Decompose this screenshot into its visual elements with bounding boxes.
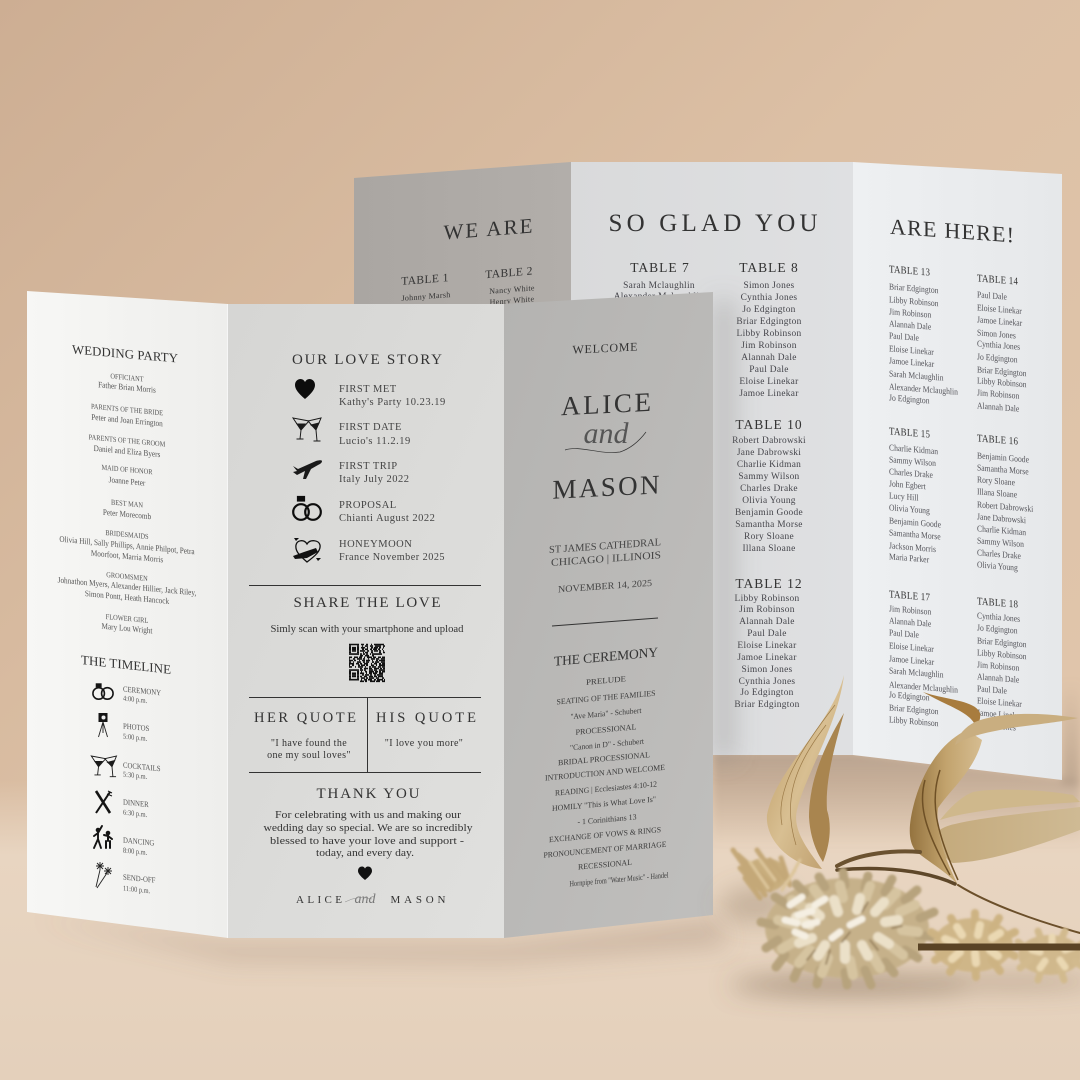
table 8 list: Jo Edgington [742, 305, 796, 315]
love story timeline text: Kathy's Party 10.23.19 [339, 397, 446, 408]
text: we are tables: TABLE 1 [401, 272, 449, 288]
thank you message: blessed to have your love and support - [270, 836, 465, 847]
timeline labels: DINNER [123, 797, 149, 809]
table 7 list: Sarah Mclaughlin [623, 281, 695, 291]
panel: front right welcome and ceremony [504, 292, 713, 938]
column: tables 13, 15, 17: Eloise Linekar [889, 641, 934, 654]
column: tables 13, 15, 17: Benjamin Goode [889, 516, 941, 530]
column: tables 14, 16, 18: Jim Robinson [977, 660, 1020, 673]
heading: our love story: OUR LOVE STORY [292, 352, 442, 368]
column: tables 14, 16, 18: Illana Sloane [977, 487, 1017, 500]
column: tables 13, 15, 17: Eloise Linekar [889, 344, 934, 357]
column: tables 13, 15, 17: Paul Dale [889, 628, 919, 640]
heading: the timeline: THE TIMELINE [81, 652, 171, 677]
names and welcome [553, 338, 660, 505]
table 10 list: Rory Sloane [744, 532, 794, 542]
column: tables 13, 15, 17: Libby Robinson [889, 295, 939, 309]
ceremony program: PRELUDE [586, 674, 626, 687]
ceremony program: INTRODUCTION AND WELCOME [545, 763, 665, 783]
her quote: HER QUOTE [254, 710, 356, 726]
column: tables 14, 16, 18: Rory Sloane [977, 475, 1015, 488]
love story timeline text: Lucio's 11.2.19 [339, 436, 411, 447]
plant cast shadow [720, 887, 1080, 995]
column: tables 14, 16, 18: Paul Dale [977, 684, 1007, 696]
love story timeline text: France November 2025 [339, 552, 445, 563]
thank you message: wedding day so special. We are so incredibly [264, 823, 473, 834]
list: wedding party names: Joanne Peter [109, 475, 146, 488]
ceremony program: PRONOUNCEMENT OF MARRIAGE [544, 840, 667, 860]
his quote: HIS QUOTE [376, 710, 476, 726]
column: tables 13, 15, 17: Jim Robinson [889, 307, 932, 320]
list: wedding party names: Simon Pontt, Heath Hancock [85, 589, 169, 606]
column: tables 13, 15, 17: Sarah Mclaughlin [889, 666, 944, 680]
column: tables 14, 16, 18: Benjamin Goode [977, 451, 1029, 465]
icon: sparklers (send-off) [96, 862, 112, 888]
icon: small heart [358, 866, 372, 880]
icon: airplane [293, 460, 322, 479]
table 10 list: Charlie Kidman [737, 460, 801, 470]
ceremony program: Hornpipe from "Water Music" - Handel [570, 870, 669, 888]
venue and date: ST JAMES CATHEDRAL [549, 537, 661, 556]
table 8 list: Eloise Linekar [739, 377, 799, 387]
divider [552, 618, 658, 626]
column: tables 14, 16, 18: Cynthia Jones [977, 339, 1020, 352]
column: tables 13, 15, 17: Briar Edgington [889, 282, 939, 296]
timeline labels: 11:00 p.m. [123, 884, 150, 895]
icon: rings (ceremony) [93, 684, 113, 699]
table 10 list: Olivia Young [742, 496, 796, 506]
table 12 list: Paul Dale [747, 629, 787, 639]
column: tables 13, 15, 17: Lucy Hill [889, 491, 919, 503]
table 8 list: TABLE 8 [739, 260, 799, 275]
column: tables 14, 16, 18: Charlie Kidman [977, 524, 1027, 538]
list: wedding party names: Moorfoot, Marria Morris [91, 548, 163, 565]
his quote [376, 710, 476, 749]
ceremony program: - 1 Corinithians 13 [578, 812, 637, 827]
venue and date: CHICAGO | ILLINOIS [551, 550, 661, 569]
love story timeline text: FIRST TRIP [339, 461, 398, 472]
timeline labels: 8:00 p.m. [123, 846, 147, 857]
panel: front middle love story [228, 304, 504, 938]
names and welcome: MASON [553, 469, 660, 505]
table 8 list: Alannah Dale [741, 353, 797, 363]
icon: dancers (dancing) [94, 826, 112, 848]
her quote: "I have found the [271, 738, 347, 749]
table 12 list: Jo Edgington [740, 688, 794, 698]
table 8 list: Jim Robinson [741, 341, 797, 351]
heading: so glad you: SO GLAD YOU [608, 210, 818, 237]
column: tables 14, 16, 18: Jane Dabrowski [977, 512, 1027, 525]
list: wedding party names: BRIDESMAIDS [105, 529, 149, 541]
table 10 list: Jane Dabrowski [737, 448, 801, 458]
signature names [296, 892, 446, 907]
leaf: horizontal lower [937, 807, 1080, 863]
column: tables 13, 15, 17: Jo Edgington [889, 690, 930, 703]
panel: back middle "so glad you" [571, 162, 853, 755]
column: tables 14, 16, 18: Cynthia Jones [977, 611, 1020, 624]
script: and [565, 417, 646, 453]
fold highlight [227, 304, 229, 938]
ceremony program [544, 643, 669, 891]
icon: rings [293, 497, 321, 520]
names and welcome: WELCOME [572, 339, 638, 357]
timeline labels: 5:30 p.m. [123, 770, 147, 781]
table 8 list [736, 260, 802, 399]
ceremony program: "Canon in D" - Schubert [570, 737, 645, 752]
icon: cocktail glasses (cocktails) [91, 756, 116, 777]
list: wedding party names: Olivia Hill, Sally Phillips, Annie Philpot, Petra [59, 534, 195, 557]
timeline labels: PHOTOS [123, 721, 149, 733]
text: we are tables [401, 213, 535, 314]
table 10 list: Robert Dabrowski [732, 436, 806, 446]
ceremony program: THE CEREMONY [554, 644, 658, 669]
column: tables 14, 16, 18: Jim Robinson [977, 388, 1020, 401]
column: tables 13, 15, 17: Briar Edgington [889, 703, 939, 717]
column: tables 14, 16, 18: Paul Dale [977, 290, 1007, 302]
icon: heart [295, 379, 315, 399]
table 7 list: Alexander Mclaughlin [614, 292, 704, 302]
venue and date: NOVEMBER 14, 2025 [558, 579, 652, 595]
panel: back right "are here" [853, 162, 1062, 780]
column: tables 13, 15, 17: Alannah Dale [889, 319, 932, 332]
table 10 list: Charles Drake [740, 484, 798, 494]
table 10 list: TABLE 10 [735, 417, 803, 432]
column: tables 14, 16, 18: Sammy Wilson [977, 536, 1025, 549]
table 8 list: Cynthia Jones [741, 293, 797, 303]
heading: wedding party: WEDDING PARTY [72, 343, 178, 366]
love story timeline text: PROPOSAL [339, 500, 397, 511]
text: scan instruction: Simly scan with your smartphone and upload [270, 624, 464, 635]
ceremony program: "Ave Maria" - Schubert [571, 706, 642, 721]
column: tables 14, 16, 18: Alannah Dale [977, 401, 1020, 414]
column: tables 13, 15, 17: Olivia Young [889, 503, 931, 516]
column: tables 13, 15, 17: Alexander Mclaughlin [889, 382, 959, 397]
stems [837, 851, 1080, 933]
column: tables 14, 16, 18: Briar Edgington [977, 365, 1027, 379]
column: tables 13, 15, 17: Jo Edgington [889, 393, 930, 406]
text: we are tables: Henry White [490, 294, 534, 307]
icon: heart with plane [293, 538, 321, 562]
timeline labels: DANCING [123, 835, 155, 848]
icon: martini glasses [293, 418, 321, 441]
table 10 list [732, 417, 806, 554]
column: tables 13, 15, 17: TABLE 17 [889, 589, 930, 604]
column: tables 14, 16, 18: Olivia Young [977, 560, 1019, 573]
list: wedding party names: Peter Morecomb [103, 507, 151, 521]
column: tables 14, 16, 18 [977, 273, 1034, 734]
love story timeline text: Italy July 2022 [339, 474, 410, 485]
script: and: and [584, 417, 630, 450]
column: tables 14, 16, 18: Robert Dabrowski [977, 500, 1034, 514]
timeline labels: 4:00 p.m. [123, 694, 147, 705]
list: wedding party names: GROOMSMEN [106, 571, 148, 583]
list: wedding party names [58, 367, 196, 640]
divider [249, 584, 481, 586]
table 12 list: Jamoe Linekar [737, 653, 797, 663]
ceremony program: EXCHANGE OF VOWS & RINGS [549, 825, 661, 844]
column: tables 13, 15, 17: Jackson Morris [889, 541, 936, 554]
text: we are tables: Johnny Marsh [401, 290, 451, 303]
timeline labels: COCKTAILS [123, 760, 161, 773]
column: tables 13, 15, 17: TABLE 13 [889, 264, 930, 279]
column: tables 14, 16, 18: Libby Robinson [977, 376, 1027, 390]
ceremony program: READING | Ecclesiastes 4:10-12 [555, 780, 657, 798]
column: tables 13, 15, 17 [889, 264, 959, 730]
list: wedding party names: Johnathon Myers, Alexander Hillier, Jack Riley, [58, 575, 196, 598]
love story timeline text: Chianti August 2022 [339, 513, 435, 524]
table 8 list: Jamoe Linekar [739, 389, 799, 399]
list: wedding party names: OFFICIANT [110, 372, 144, 384]
list: wedding party names: Father Brian Morris [98, 380, 156, 395]
column: tables 13, 15, 17: Sarah Mclaughlin [889, 369, 944, 383]
column: tables 14, 16, 18: Samantha Morse [977, 463, 1029, 477]
table 7 list [614, 260, 704, 302]
love story timeline text: FIRST MET [339, 384, 397, 395]
column: tables 13, 15, 17: Alexander Mclaughlin [889, 680, 959, 695]
column: tables 13, 15, 17: TABLE 15 [889, 426, 930, 441]
text: we are tables: WE ARE [444, 213, 532, 245]
column: tables 13, 15, 17: Alannah Dale [889, 616, 932, 629]
flower: main head [761, 872, 934, 985]
table 7 list: TABLE 7 [630, 260, 690, 275]
thank you message: today, and every day. [316, 848, 414, 859]
panel: front left wedding party and timeline [27, 291, 228, 938]
table 12 list: Cynthia Jones [739, 677, 795, 687]
column: tables 14, 16, 18: Jo Edgington [977, 352, 1018, 365]
list: wedding party names: PARENTS OF THE GROOM [89, 433, 165, 449]
list: wedding party names: PARENTS OF THE BRIDE [91, 402, 163, 418]
column: tables 13, 15, 17: Sammy Wilson [889, 455, 937, 468]
timeline labels: 5:00 p.m. [123, 732, 147, 743]
list: wedding party names: FLOWER GIRL [106, 613, 148, 625]
column: tables 13, 15, 17: Jim Robinson [889, 604, 932, 617]
leaf: curved body [910, 730, 982, 885]
column: tables 13, 15, 17: Charles Drake [889, 467, 933, 480]
her quote: one my soul loves" [267, 750, 351, 761]
column: tables 14, 16, 18: Simon Jones [977, 328, 1016, 341]
ceremony program: PROCESSIONAL [576, 722, 637, 737]
column: tables 13, 15, 17: Jamoe Linekar [889, 654, 934, 667]
panel: back left "we are" [354, 162, 571, 320]
her quote [254, 710, 356, 761]
column: tables 14, 16, 18: TABLE 14 [977, 273, 1018, 288]
thank you message [264, 810, 473, 859]
list: wedding party names: BEST MAN [111, 498, 143, 510]
table 12 list: Eloise Linekar [737, 641, 797, 651]
table 12 list [734, 576, 803, 710]
column: tables 13, 15, 17: John Egbert [889, 479, 926, 491]
column: tables 14, 16, 18: TABLE 16 [977, 433, 1018, 448]
love story timeline text: HONEYMOON [339, 539, 412, 550]
shadow of front brochure [40, 300, 735, 962]
ceremony program: HOMILY "This is What Love Is" [552, 795, 656, 813]
venue and date [549, 537, 661, 596]
table 12 list: TABLE 12 [735, 576, 803, 591]
column: tables 14, 16, 18: Alannah Dale [977, 672, 1020, 685]
text: we are tables: TABLE 2 [485, 265, 533, 281]
table 10 list: Illana Sloane [742, 544, 796, 554]
list: wedding party names: Mary Lou Wright [102, 621, 153, 636]
stem over flowers [918, 944, 1080, 950]
icon: knife and fork (dinner) [96, 791, 112, 813]
timeline labels: 6:30 p.m. [123, 808, 147, 819]
signature names: ALICE [296, 894, 342, 906]
names and welcome: ALICE [561, 387, 651, 421]
heading: thank you: THANK YOU [316, 786, 420, 802]
column: tables 14, 16, 18: Eloise Linekar [977, 696, 1022, 709]
front brochure: program [27, 291, 713, 938]
column: tables 13, 15, 17: Maria Parker [889, 552, 929, 565]
column: tables 14, 16, 18: Jamoe Linekar [977, 315, 1022, 328]
column: tables 14, 16, 18: Simon Jones [977, 720, 1016, 733]
ceremony program: RECESSIONAL [578, 858, 632, 872]
list: wedding party names: MAID OF HONOR [102, 463, 153, 477]
table 12 list: Briar Edgington [734, 700, 800, 710]
list: wedding party names: Daniel and Eliza Byers [94, 443, 160, 459]
heading: are here: ARE HERE! [890, 214, 1014, 247]
table 8 list: Libby Robinson [737, 329, 801, 339]
column: tables 13, 15, 17: Paul Dale [889, 331, 919, 343]
column: tables 14, 16, 18: Jamoe Linekar [977, 708, 1022, 721]
ceremony program: BRIDAL PROCESSIONAL [558, 750, 650, 767]
table 8 list: Briar Edgington [736, 317, 802, 327]
table 8 list: Paul Dale [749, 365, 789, 375]
flower cluster: small left tuft [733, 850, 800, 898]
icon: camera on tripod (photos) [98, 713, 108, 737]
his quote: "I love you more" [385, 738, 463, 749]
timeline labels [123, 684, 162, 897]
table 10 list: Benjamin Goode [735, 508, 803, 518]
column: tables 14, 16, 18: Jo Edgington [977, 623, 1018, 636]
table 12 list: Simon Jones [742, 665, 793, 675]
column: tables 13, 15, 17: Charlie Kidman [889, 443, 939, 456]
icon: QR code [349, 644, 385, 681]
flower: second head [931, 913, 1015, 977]
thank you message: For celebrating with us and making our [275, 810, 462, 821]
column: tables 13, 15, 17: Samantha Morse [889, 528, 941, 542]
column: tables 13, 15, 17: Jamoe Linekar [889, 356, 934, 369]
dried plant decoration [720, 675, 1080, 995]
table 8 list: Simon Jones [744, 281, 795, 291]
table 12 list: Jim Robinson [739, 605, 795, 615]
leaf: horizontal upper [940, 790, 1080, 820]
signature names: MASON [390, 894, 446, 906]
table 10 list: Sammy Wilson [738, 472, 800, 482]
column: tables 13, 15, 17: Libby Robinson [889, 715, 939, 729]
divider and quote box lines [249, 697, 481, 772]
back brochure: seating chart [354, 162, 1062, 780]
love story timeline text [339, 384, 446, 563]
text: we are tables: Nancy White [489, 283, 535, 296]
timeline labels: SEND-OFF [123, 872, 155, 885]
column: tables 14, 16, 18: Briar Edgington [977, 636, 1027, 650]
table 10 list: Samantha Morse [735, 520, 803, 530]
column: tables 14, 16, 18: Eloise Linekar [977, 303, 1022, 316]
table 12 list: Alannah Dale [739, 617, 795, 627]
table 12 list: Libby Robinson [735, 594, 799, 604]
love story timeline text: FIRST DATE [339, 422, 402, 433]
column: tables 14, 16, 18: Libby Robinson [977, 648, 1027, 662]
ceremony program: SEATING OF THE FAMILIES [557, 689, 656, 707]
heading: share the love: SHARE THE LOVE [294, 595, 440, 611]
timeline labels: CEREMONY [123, 684, 162, 698]
column: tables 14, 16, 18: Charles Drake [977, 548, 1021, 561]
list: wedding party names: Peter and Joan Errington [91, 412, 163, 429]
column: tables 14, 16, 18: TABLE 18 [977, 596, 1018, 611]
flower: third head [1018, 931, 1080, 980]
leaf: second left [809, 713, 844, 862]
shadow behind back brochure on floor [713, 680, 1080, 845]
leaf: tall left [767, 675, 844, 869]
signature names: and [354, 892, 376, 907]
leaf: small brown tip [923, 692, 980, 725]
leaf: long top blade [955, 714, 1078, 745]
